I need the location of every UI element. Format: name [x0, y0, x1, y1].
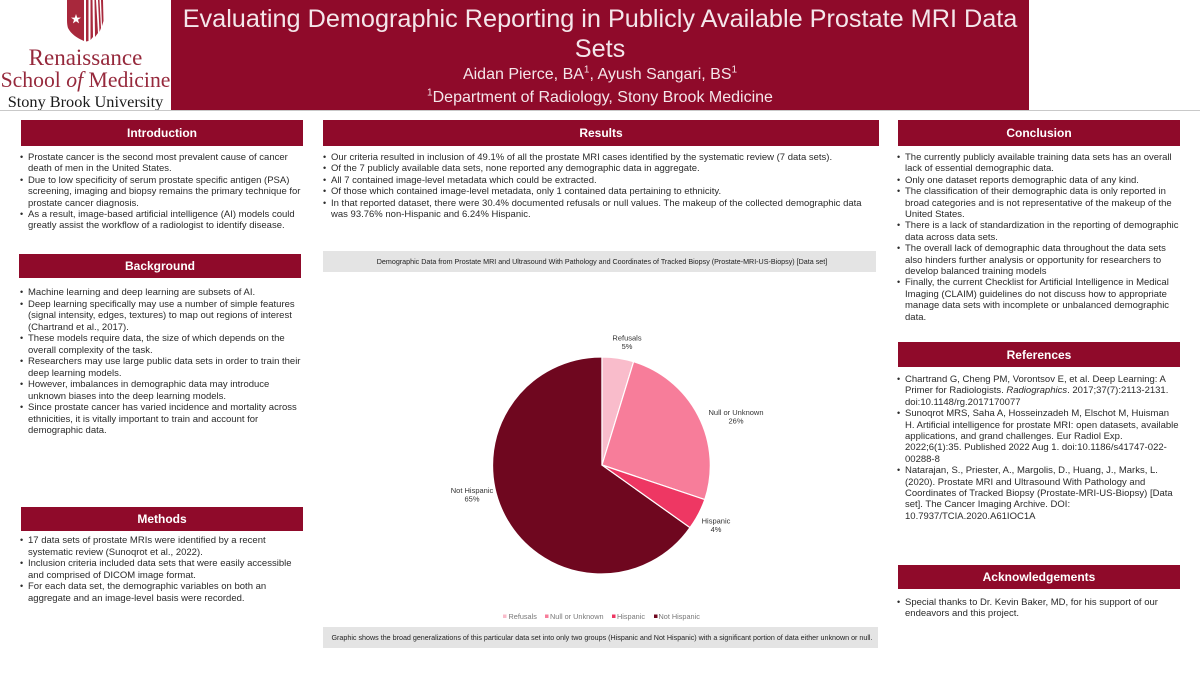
- text: introduction bullets: As a result, image-based artificial intelligence (AI) models could: [28, 209, 295, 220]
- text: conclusion bullets: also hinders further analysis or opportunity for researchers to: [905, 255, 1161, 266]
- text: references list: Coordinates of Tracked Biopsy (Prostate-MRI-US-Biopsy) [Data: [905, 488, 1173, 499]
- slice: Refusals: [602, 357, 634, 465]
- text: results bullets: All 7 contained image-level metadata which could be extracted.: [331, 175, 597, 186]
- logo text: School of Medicine: School of Medicine: [1, 68, 170, 92]
- label: Hispanic 4%: Hispanic: [702, 516, 730, 526]
- text: references list: Sunoqrot MRS, Saha A, Hosseinzadeh M, Elschot M, Huisman: [905, 408, 1169, 419]
- text: references list: 10.7937/TCIA.2020.A61IOC1A: [905, 511, 1035, 522]
- text: background bullets: (signal intensity, edges, textures) to map out regions of interest: [28, 310, 292, 321]
- text: acknowledgements: [897, 597, 1158, 619]
- text: conclusion bullets: data across data sets.: [905, 232, 998, 243]
- text: results bullets: In that reported dataset, there were 30.4% documented refusals or null values. The makeup of the collected demographic data: [331, 198, 862, 209]
- panel: results: [323, 120, 879, 648]
- text: conclusion bullets: develop balanced training models: [905, 266, 1047, 277]
- text: conclusion bullets: The overall lack of demographic data throughout the data sets: [905, 243, 1166, 254]
- text: introduction bullets: screening, imaging and biopsy remains the primary technique for: [28, 186, 300, 197]
- text: references list: set]. The Cancer Imaging Archive. DOI:: [905, 499, 1070, 510]
- text: acknowledgements: Special thanks to Dr. Kevin Baker, MD, for his support of our: [905, 597, 1158, 608]
- panel: acknowledgements: [897, 565, 1180, 619]
- text: conclusion bullets: Finally, the current Checklist for Artificial Intelligence in Medical: [905, 277, 1169, 288]
- text: references list: 00288-8: [905, 454, 940, 465]
- text: results bullets: [323, 152, 862, 220]
- text: background bullets: ethnicities, it is vitally important to train and account for: [28, 414, 258, 424]
- text: references list: Primer for Radiologists. Radiographics. 2017;37(7):2113-2131.: [905, 385, 1168, 396]
- panel: methods: [20, 507, 303, 604]
- text: background bullets: overall complexity of the task.: [28, 344, 153, 356]
- text: methods bullets: 17 data sets of prostate MRIs were identified by a recent: [28, 535, 266, 546]
- text: conclusion bullets: [897, 152, 1179, 323]
- text: introduction bullets: Due to low specificity of serum prostate specific antigen (PSA): [28, 175, 289, 186]
- text: background bullets: (Chartrand et al., 2017).: [28, 322, 129, 332]
- slice: Hispanic: [602, 465, 705, 528]
- heading: Methods: [21, 507, 303, 531]
- text: background bullets: Machine learning and deep learning are subsets of AI.: [28, 287, 255, 298]
- text: conclusion bullets: broad categories and is not representative of the makeup of the: [905, 198, 1172, 209]
- text: background bullets: unknown biases into the deep learning models.: [28, 390, 226, 402]
- heading: Conclusion: Conclusion: [1006, 126, 1072, 140]
- text: methods bullets: Inclusion criteria included data sets that were easily accessible: [28, 558, 292, 569]
- text: references list: [897, 374, 1179, 522]
- heading: Background: Background: [125, 259, 195, 273]
- chart caption: interpretation: [323, 627, 878, 648]
- chart caption: interpretation: Graphic shows the broad generalizations of this particular data set into only two groups (Hispanic and Not Hispanic) with a significant portion of data either unknown or null.: [332, 634, 872, 642]
- text: results bullets: was 93.76% non-Hispanic and 6.24% Hispanic.: [331, 209, 531, 220]
- heading: Introduction: Introduction: [127, 126, 197, 140]
- text: references list: Chartrand G, Cheng PM, Vorontsov E, et al. Deep Learning: A: [905, 374, 1166, 385]
- text: methods bullets: aggregate and an image-level basis were recorded.: [28, 593, 245, 604]
- text: acknowledgements: endeavors and this project.: [905, 608, 1019, 619]
- text: introduction bullets: prostate cancer diagnosis.: [28, 198, 139, 209]
- text: references list: H. Artificial intelligence for prostate MRI: open datasets, available: [905, 420, 1179, 431]
- text: conclusion bullets: manage data sets with incomplete or unbalanced demographic: [905, 300, 1169, 311]
- title banner: [171, 0, 1029, 110]
- label: Null or Unknown 26%: 26%: [728, 416, 744, 426]
- text: results bullets: Of the 7 publicly available data sets, none reported any demographic data in aggregate.: [331, 163, 700, 174]
- text: background bullets: However, imbalances in demographic data may introduce: [28, 379, 269, 390]
- text: methods bullets: and comprised of DICOM image format.: [28, 570, 196, 581]
- text: conclusion bullets: Imaging (CLAIM) guidelines do not discuss how to appropriate: [905, 289, 1167, 300]
- text: methods bullets: For each data set, the demographic variables on both an: [28, 581, 266, 592]
- legend: Null or Unknown: [550, 612, 604, 621]
- title: Sets: [575, 35, 625, 63]
- logo: Renaissance School of Medicine: [1, 0, 170, 110]
- text: background bullets: deep learning models.: [28, 368, 121, 378]
- heading: Acknowledgements: [898, 565, 1180, 589]
- text: introduction bullets: greatly assist the workflow of a radiologist to identify disease.: [28, 220, 285, 231]
- text: introduction bullets: Prostate cancer is the second most prevalent cause of cancer: [28, 152, 288, 163]
- authors: Aidan Pierce, BA1, Ayush Sangari, BS1: [463, 65, 737, 83]
- text: references list: (2020). Prostate MRI and Ultrasound With Pathology and: [905, 477, 1145, 488]
- text: methods bullets: systematic review (Sunoqrot et al., 2022).: [28, 547, 203, 558]
- text: background bullets: demographic data.: [28, 425, 107, 436]
- text: references list: 2022;6(1):35. Published 2022 Aug 1. doi:10.1186/s41747-022-: [905, 442, 1167, 453]
- heading: Introduction: [21, 120, 303, 146]
- text: introduction bullets: [20, 152, 300, 231]
- text: references list: doi:10.1148/rg.2017170077: [905, 397, 1021, 408]
- panel: references: [897, 342, 1180, 522]
- pie chart: ethnicity breakdown: [451, 334, 764, 621]
- text: introduction bullets: death of men in the United States.: [28, 163, 172, 174]
- chart caption: data set name: [323, 251, 876, 272]
- label: Not Hispanic 65%: Not Hispanic: [451, 486, 493, 495]
- panel: conclusion: [897, 120, 1180, 323]
- legend: Refusals: [508, 612, 537, 621]
- text: methods bullets: [20, 535, 292, 604]
- heading: References: [898, 342, 1180, 367]
- text: background bullets: Researchers may use large public data sets in order to train their: [28, 356, 300, 367]
- heading: References: References: [1007, 348, 1071, 362]
- text: conclusion bullets: data.: [905, 312, 926, 323]
- text: results bullets: Our criteria resulted in inclusion of 49.1% of all the prostate MRI cases identified by the systematic review (7 data sets).: [331, 152, 832, 163]
- text: conclusion bullets: The currently publicly available training data sets has an overall: [905, 152, 1172, 163]
- label: Refusals 5%: Refusals: [612, 334, 642, 342]
- heading: Conclusion: [898, 120, 1180, 146]
- slice: Null or Unknown: [602, 362, 710, 500]
- text: background bullets: These models require data, the size of which depends on the: [28, 333, 285, 344]
- legend: Hispanic: [617, 612, 645, 621]
- chart caption: data set name: Demographic Data from Prostate MRI and Ultrasound With Pathology and Coordinates of Tracked Biopsy (Prostate-MRI-US-Biopsy) [Data set]: [377, 258, 827, 266]
- text: conclusion bullets: There is a lack of standardization in the reporting of demographic: [905, 220, 1179, 231]
- text: background bullets: Deep learning specifically may use a number of simple features: [28, 298, 295, 310]
- heading: Results: Results: [579, 126, 623, 140]
- text: conclusion bullets: United States.: [905, 209, 965, 220]
- label: Not Hispanic 65%: 65%: [464, 494, 480, 504]
- label: Refusals 5%: 5%: [622, 342, 633, 351]
- logo text: Renaissance: Renaissance: [29, 45, 142, 70]
- text: references list: Natarajan, S., Priester, A., Margolis, D., Huang, J., Marks, L.: [905, 465, 1158, 476]
- legend: Not Hispanic: [658, 612, 700, 621]
- legend: [503, 612, 700, 621]
- heading: Acknowledgements: Acknowledgements: [983, 570, 1095, 584]
- label: Hispanic 4%: 4%: [711, 525, 722, 534]
- text: conclusion bullets: Only one dataset reports demographic data of any kind.: [905, 175, 1139, 186]
- text: background bullets: [20, 287, 300, 436]
- heading: Methods: Methods: [137, 512, 187, 526]
- panel: background: [19, 254, 301, 436]
- title: Evaluating Demographic Reporting in Publicly Available Prostate MRI Data: [183, 5, 1017, 33]
- title: [183, 5, 1018, 63]
- slice: Not Hispanic: [493, 357, 690, 574]
- panel: introduction: [20, 120, 303, 231]
- label: Null or Unknown 26%: Null or Unknown: [708, 408, 764, 417]
- text: background bullets: Since prostate cancer has varied incidence and mortality across: [28, 402, 297, 413]
- text: conclusion bullets: The classification of their demographic data is only reported in: [905, 186, 1166, 197]
- affiliation: 1Department of Radiology, Stony Brook Medicine: [427, 88, 773, 106]
- text: references list: applications, and grand challenges. Eur Radiol Exp.: [905, 431, 1123, 442]
- icon: shield: [67, 0, 104, 42]
- heading: Background: [19, 254, 301, 278]
- text: conclusion bullets: lack of essential demographic data.: [905, 163, 1054, 174]
- heading: Results: [323, 120, 879, 146]
- text: results bullets: Of those which contained image-level metadata, only 1 contained data pertaining to ethnicity.: [331, 186, 721, 197]
